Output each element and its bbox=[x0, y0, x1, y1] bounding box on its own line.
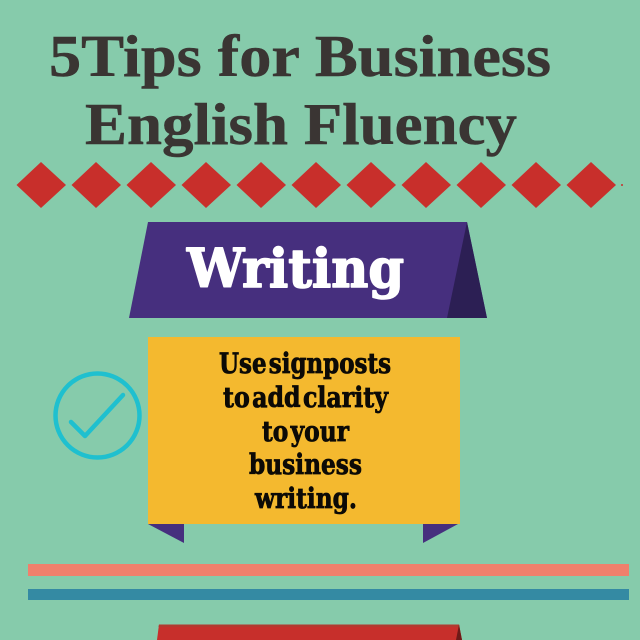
banner: Writing bbox=[129, 222, 487, 318]
tip text: to add clarity bbox=[223, 381, 389, 414]
tip text: business bbox=[249, 448, 362, 481]
blue stripe bbox=[28, 589, 629, 600]
salmon stripe bbox=[28, 564, 629, 576]
ribbon tail right bbox=[423, 524, 458, 543]
title: 5Tips for Business bbox=[49, 23, 551, 89]
tip text: writing. bbox=[254, 482, 357, 515]
diamond divider row bbox=[16, 162, 623, 208]
tip text: to your bbox=[262, 415, 350, 448]
ribbon tail left bbox=[148, 524, 184, 543]
icon: check mark in circle bbox=[56, 374, 140, 458]
panel: writing tip bbox=[148, 337, 460, 543]
tip text bbox=[219, 347, 391, 515]
title bbox=[49, 23, 551, 157]
next banner: red, cropped bbox=[157, 624, 462, 640]
tip text: Use signposts bbox=[219, 347, 391, 380]
title: English Fluency bbox=[85, 91, 517, 157]
banner heading: Writing bbox=[186, 238, 404, 300]
